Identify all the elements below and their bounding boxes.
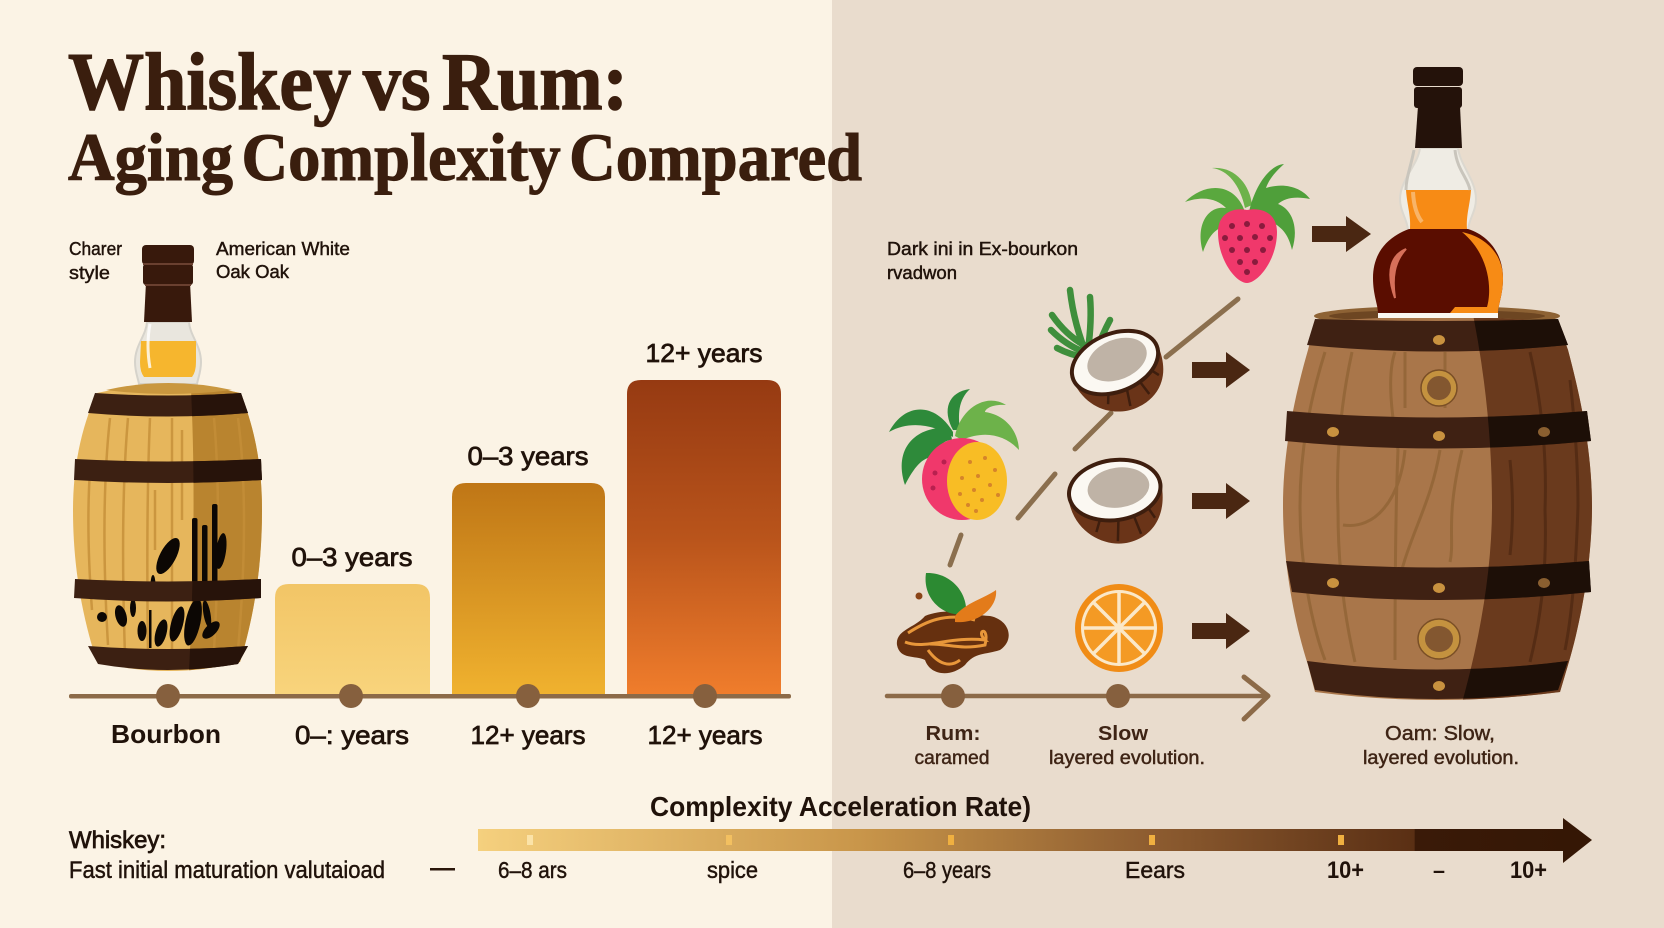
bar: 12+ years — [627, 338, 781, 695]
labels: rate scale: 6–8 years — [903, 857, 991, 883]
icon: rum bottle — [1373, 67, 1503, 318]
icon: whiskey barrel — [73, 383, 262, 671]
text: whiskey summary: Whiskey: — [69, 827, 166, 854]
text: American white oak label: Oak Oak — [216, 261, 290, 282]
labels: rum timeline — [914, 722, 1205, 769]
labels: whiskey timeline: 0–: years — [295, 720, 409, 750]
icon: orange slice — [1075, 584, 1163, 672]
labels: rum timeline: Slow — [1098, 722, 1148, 745]
title: Whiskey vs Rum: — [68, 36, 628, 127]
bar: 0-3 years medium: 0–3 years — [468, 441, 588, 471]
text: oak caption: layered evolution. — [1363, 748, 1519, 769]
icon: rum barrel — [1283, 306, 1592, 700]
timeline: rum — [887, 677, 1268, 719]
bar: 12+ years: 12+ years — [646, 338, 762, 368]
icon: tropical berry — [1185, 164, 1310, 283]
panel: rum background — [832, 0, 1664, 928]
labels: whiskey timeline: Bourbon — [111, 719, 221, 749]
title — [68, 36, 862, 195]
arrow: coconut to barrel — [1192, 352, 1250, 388]
bar: 0-3 years medium — [452, 441, 605, 695]
arrow: berry to bottle — [1312, 216, 1371, 252]
labels: rate scale: – — [1433, 858, 1445, 883]
icon: coconut top — [1060, 316, 1177, 427]
labels: rum timeline: Rum: — [926, 722, 980, 745]
labels: whiskey timeline: 12+ years — [470, 720, 586, 750]
dash — [430, 868, 455, 870]
text: dark rum label: Dark ini in Ex-bourkon — [887, 239, 1078, 259]
arrow: complexity gradient bar — [478, 818, 1592, 863]
bung holes — [1418, 370, 1460, 659]
timeline: whiskey — [69, 684, 791, 708]
connector lines — [950, 299, 1238, 565]
labels: rate scale — [498, 857, 1547, 884]
icon: mango fruit — [889, 389, 1019, 520]
text: American white oak label — [216, 238, 350, 282]
text: char style label: Charer — [69, 238, 122, 259]
arrow: middle coconut to barrel — [1192, 483, 1250, 519]
bands: barrel hoops — [74, 393, 262, 670]
bands: rum barrel hoops — [1285, 319, 1591, 699]
text: oak caption: Oam: Slow, — [1385, 722, 1495, 745]
labels: whiskey timeline: 12+ years — [648, 720, 762, 750]
icon: caramel splash with leaf — [897, 573, 1009, 673]
text: American white oak label: American White — [216, 238, 350, 259]
labels: rum timeline: layered evolution. — [1049, 748, 1205, 769]
icon: palm frond — [1051, 290, 1110, 358]
bar: 0-3 years — [275, 542, 430, 695]
icon: char marks — [97, 504, 228, 648]
text: whiskey summary: Fast initial maturation valutaioad — [69, 857, 385, 884]
text: char style label — [69, 238, 122, 283]
text: whiskey summary — [69, 827, 385, 884]
heading: complexity acceleration rate: Complexity Acceleration Rate) — [650, 791, 1031, 822]
labels: rum timeline: caramed — [914, 748, 990, 769]
text: dark rum label: rvadwon — [887, 263, 957, 283]
rivets — [1327, 335, 1550, 691]
icon: coconut bottom — [1063, 452, 1170, 550]
title: Aging Complexity Compared — [68, 119, 862, 195]
bar: 0-3 years: 0–3 years — [292, 542, 412, 572]
text: dark rum label — [887, 239, 1078, 283]
labels: rate scale: 6–8 ars — [498, 857, 567, 883]
panel: whiskey background — [0, 0, 832, 928]
labels: rate scale: 10+ — [1510, 857, 1547, 884]
labels: whiskey timeline — [111, 719, 762, 750]
labels: rate scale: spice — [707, 857, 758, 883]
arrow: orange to barrel — [1192, 613, 1250, 649]
text: oak caption — [1363, 722, 1519, 769]
labels: rate scale: 10+ — [1327, 857, 1364, 884]
labels: rate scale: Eears — [1125, 857, 1185, 883]
icon: whiskey bottle — [135, 245, 201, 384]
text: char style label: style — [69, 262, 110, 283]
